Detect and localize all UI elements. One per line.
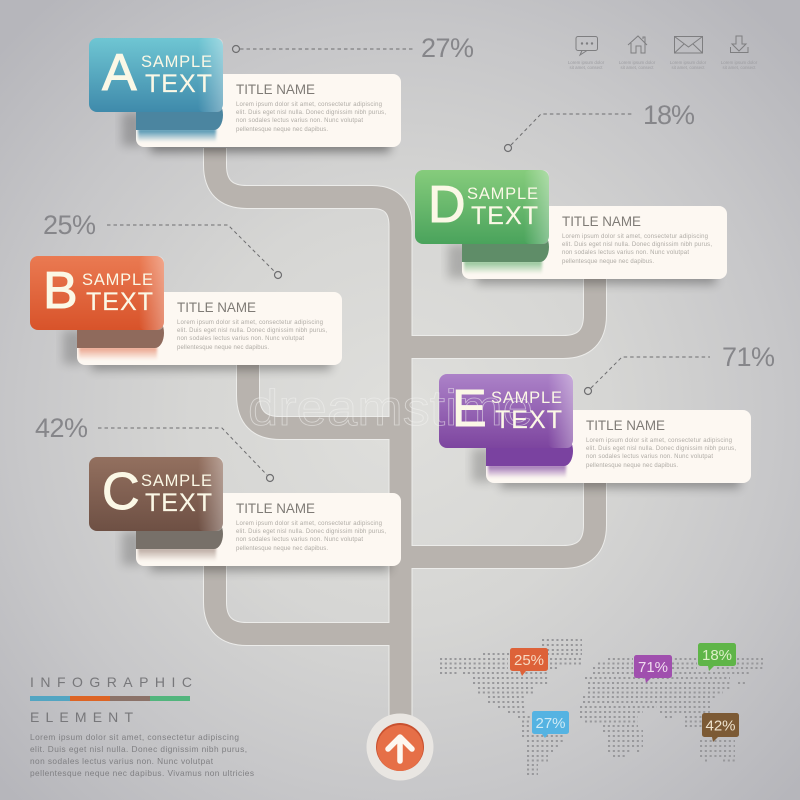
card B: TITLE NAME [177, 299, 256, 315]
callout A 27%: 27% [421, 33, 474, 63]
description text [30, 732, 254, 778]
card B: pellentesque neque nec dapibus. [177, 345, 269, 351]
card D: elit. Duis eget nisl nulla. Donec dignissim nibh purus, [562, 242, 712, 248]
card E: TEXT [495, 406, 562, 434]
card E: SAMPLE [491, 389, 562, 407]
card D [415, 170, 727, 284]
card C: pellentesque neque nec dapibus. [236, 546, 328, 552]
icon: download [721, 36, 758, 70]
card E: pellentesque neque nec dapibus. [586, 463, 678, 469]
map bubble 18% [698, 643, 736, 671]
card D: SAMPLE [467, 185, 538, 203]
card D: pellentesque neque nec dapibus. [562, 259, 654, 265]
card B: SAMPLE [82, 271, 153, 289]
card B [30, 256, 342, 370]
card A: Lorem ipsum dolor sit amet, consectetur adipiscing [236, 102, 382, 108]
callout B 25% [43, 210, 282, 278]
icon: download: sit amet, consect [723, 65, 756, 70]
description text: elit. Duis eget nisl nulla. Donec dignissim nibh purus, [30, 744, 247, 754]
heading: infographic element [30, 674, 192, 725]
dotted world map [440, 640, 763, 774]
map bubble 42%: 42% [705, 718, 736, 734]
callout C 42%: 42% [35, 413, 88, 443]
map bubble 25%: 25% [514, 652, 544, 669]
card C: TITLE NAME [236, 500, 315, 516]
card C: TEXT [145, 489, 212, 517]
card E: non sodales lectus varius non. Nunc volutpat [586, 454, 713, 460]
arrow button [366, 714, 434, 780]
map bubble 42% [702, 713, 739, 742]
card B: elit. Duis eget nisl nulla. Donec dignissim nibh purus, [177, 328, 327, 334]
card D: TITLE NAME [562, 213, 641, 229]
icon: chat bubble: sit amet, consect [570, 65, 603, 70]
callout E 71% [584, 342, 775, 394]
description text: non sodales lectus varius non. Nunc volutpat [30, 756, 214, 766]
map bubble 71%: 71% [638, 659, 668, 676]
map bubble 27% [532, 711, 569, 738]
card B: TEXT [86, 288, 153, 316]
card D: non sodales lectus varius non. Nunc volutpat [562, 250, 689, 256]
icon: house: Lorem ipsum dolor [619, 60, 656, 65]
card E [439, 374, 751, 488]
icon: envelope: sit amet, consect [672, 65, 705, 70]
card C: elit. Duis eget nisl nulla. Donec dignissim nibh purus, [236, 529, 386, 535]
card B: non sodales lectus varius non. Nunc volutpat [177, 336, 304, 342]
card A: non sodales lectus varius non. Nunc volutpat [236, 118, 363, 124]
card E: Lorem ipsum dolor sit amet, consectetur adipiscing [586, 438, 732, 444]
card E: elit. Duis eget nisl nulla. Donec dignissim nibh purus, [586, 446, 736, 452]
icon: download: Lorem ipsum dolor [721, 60, 758, 65]
icon: envelope: Lorem ipsum dolor [670, 60, 707, 65]
card C: C [102, 463, 140, 521]
description text: Lorem ipsum dolor sit amet, consectetur adipiscing [30, 732, 239, 742]
card E: E [452, 380, 487, 438]
top icon row [568, 36, 758, 70]
card C: non sodales lectus varius non. Nunc volutpat [236, 537, 363, 543]
watermark: dreamstime [248, 380, 533, 436]
tree connector pipes [215, 148, 595, 730]
map bubble 71% [634, 655, 672, 683]
callout C 42% [35, 413, 274, 482]
callout E 71%: 71% [722, 342, 775, 372]
colour strip [30, 696, 190, 701]
card C: SAMPLE [141, 472, 212, 490]
callout D 18%: 18% [643, 100, 695, 130]
map bubble 25% [510, 648, 548, 676]
card A: A [102, 44, 137, 102]
icon: envelope [670, 36, 707, 70]
heading: infographic element: ELEMENT [30, 709, 133, 725]
card A: TITLE NAME [236, 81, 315, 97]
card A: elit. Duis eget nisl nulla. Donec dignissim nibh purus, [236, 110, 386, 116]
callout A 27% [232, 33, 474, 63]
card C [89, 457, 401, 571]
card A: pellentesque neque nec dapibus. [236, 127, 328, 133]
card C: Lorem ipsum dolor sit amet, consectetur adipiscing [236, 521, 382, 527]
card A: SAMPLE [141, 53, 212, 71]
card A: TEXT [145, 70, 212, 98]
callout D 18% [504, 100, 695, 152]
heading: infographic element: INFOGRAPHIC [30, 674, 192, 690]
icon: chat bubble [568, 36, 605, 70]
icon: house: sit amet, consect [621, 65, 654, 70]
card D: TEXT [471, 202, 538, 230]
map bubble 18%: 18% [702, 647, 732, 664]
map bubble 27%: 27% [535, 715, 566, 732]
card A [89, 38, 401, 152]
card D: D [428, 176, 466, 234]
card D: Lorem ipsum dolor sit amet, consectetur adipiscing [562, 234, 708, 240]
description text: pellentesque neque nec dapibus. Vivamus non ultricies [30, 768, 254, 778]
card B: B [43, 262, 78, 320]
card E: TITLE NAME [586, 417, 665, 433]
callout B 25%: 25% [43, 210, 96, 240]
icon: house [619, 36, 656, 70]
icon: chat bubble: Lorem ipsum dolor [568, 60, 605, 65]
card B: Lorem ipsum dolor sit amet, consectetur adipiscing [177, 320, 323, 326]
